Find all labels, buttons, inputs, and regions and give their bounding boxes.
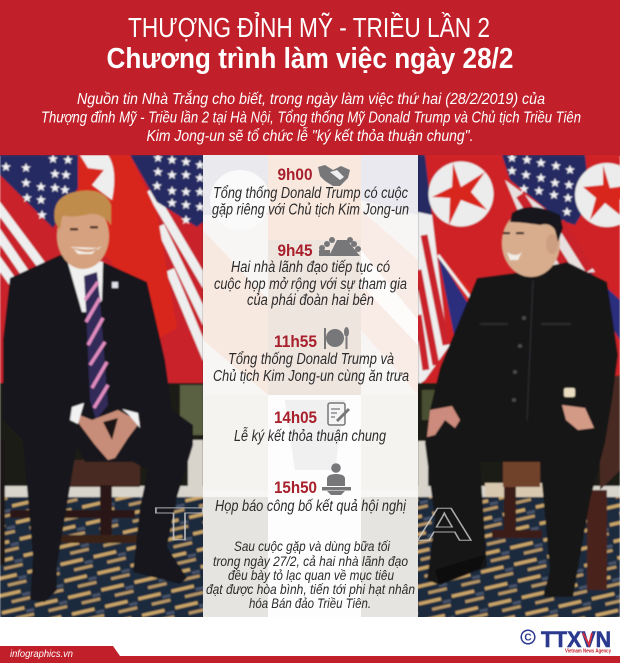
icon: handshake	[318, 165, 350, 186]
footer: red bar with source tab	[0, 646, 620, 663]
schedule item 11h55: Tổng thống Donald Trump và	[228, 351, 394, 368]
schedule item 9h45: 9h45	[278, 242, 312, 260]
figure: Kim Jong-un	[425, 207, 618, 597]
schedule item 14h05	[234, 403, 386, 445]
schedule item 11h55: Chủ tịch Kim Jong-un cùng ăn trưa	[213, 368, 409, 385]
schedule item 15h50: 15h50	[274, 479, 317, 497]
schedule item 9h45: cuộc họp mở rộng với sự tham gia	[214, 276, 407, 293]
photo: wall and floor	[0, 375, 620, 619]
schedule item 9h00: 9h00	[278, 166, 312, 184]
logo: TTXVN: Vietnam News Agency	[565, 648, 611, 654]
schedule item 9h45: Hai nhà lãnh đạo tiếp tục có	[231, 259, 390, 276]
figure: Donald Trump	[3, 191, 193, 602]
intro paragraph: Kim Jong-un sẽ tổ chức lễ "ký kết thỏa thuận chung".	[146, 126, 474, 145]
icon: signing document	[328, 403, 350, 425]
center schedule panel	[203, 155, 418, 617]
logo: TTXVN: C	[524, 632, 532, 644]
schedule item 15h50	[215, 463, 406, 515]
photo: leaders seated before flags	[0, 153, 620, 619]
icon: meeting table	[319, 237, 361, 256]
logo: TTXVN	[521, 627, 611, 654]
source link text: infographics.vn	[10, 648, 73, 660]
closing note	[206, 538, 415, 611]
schedule item 11h55	[213, 327, 409, 385]
logo: TTXVN: TTXVN	[541, 627, 611, 652]
icon: press conference speaker	[322, 463, 351, 495]
closing note: đều bày tỏ lạc quan về mục tiêu	[228, 567, 394, 583]
icon: plate and cutlery	[324, 327, 349, 349]
header panel	[0, 0, 620, 156]
photo left: flags	[0, 153, 215, 385]
intro paragraph: Nguồn tin Nhà Trắng cho biết, trong ngày làm việc thứ hai (28/2/2019) của	[77, 89, 545, 108]
schedule item 9h00	[212, 165, 409, 218]
watermark: TTXVNA: TTXVNA	[155, 498, 473, 550]
schedule item 14h05: 14h05	[274, 409, 317, 427]
closing note: trong ngày 27/2, cả hai nhà lãnh đạo	[213, 553, 408, 569]
photo right: flags	[418, 153, 620, 385]
title line 2: Chương trình làm việc ngày 28/2	[106, 43, 514, 75]
schedule item 9h45: của phái đoàn hai bên	[247, 292, 374, 309]
schedule item 9h00: Tổng thống Donald Trump có cuộc	[213, 185, 408, 202]
closing note: hóa Bán đảo Triều Tiên.	[249, 595, 371, 611]
title line 1: THƯỢNG ĐỈNH MỸ - TRIỀU LẦN 2	[128, 11, 490, 43]
schedule item 11h55: 11h55	[274, 333, 317, 351]
closing note: Sau cuộc gặp và dùng bữa tối	[234, 538, 391, 554]
schedule item 9h45	[214, 237, 407, 309]
intro paragraph	[41, 89, 581, 145]
schedule item 9h00: gặp riêng với Chủ tịch Kim Jong-un	[212, 202, 409, 218]
closing note: đạt được hòa bình, tiến tới phi hạt nhân	[206, 581, 415, 597]
schedule item 15h50: Họp báo công bố kết quả hội nghị	[215, 498, 406, 515]
schedule item 14h05: Lễ ký kết thỏa thuận chung	[234, 428, 386, 445]
